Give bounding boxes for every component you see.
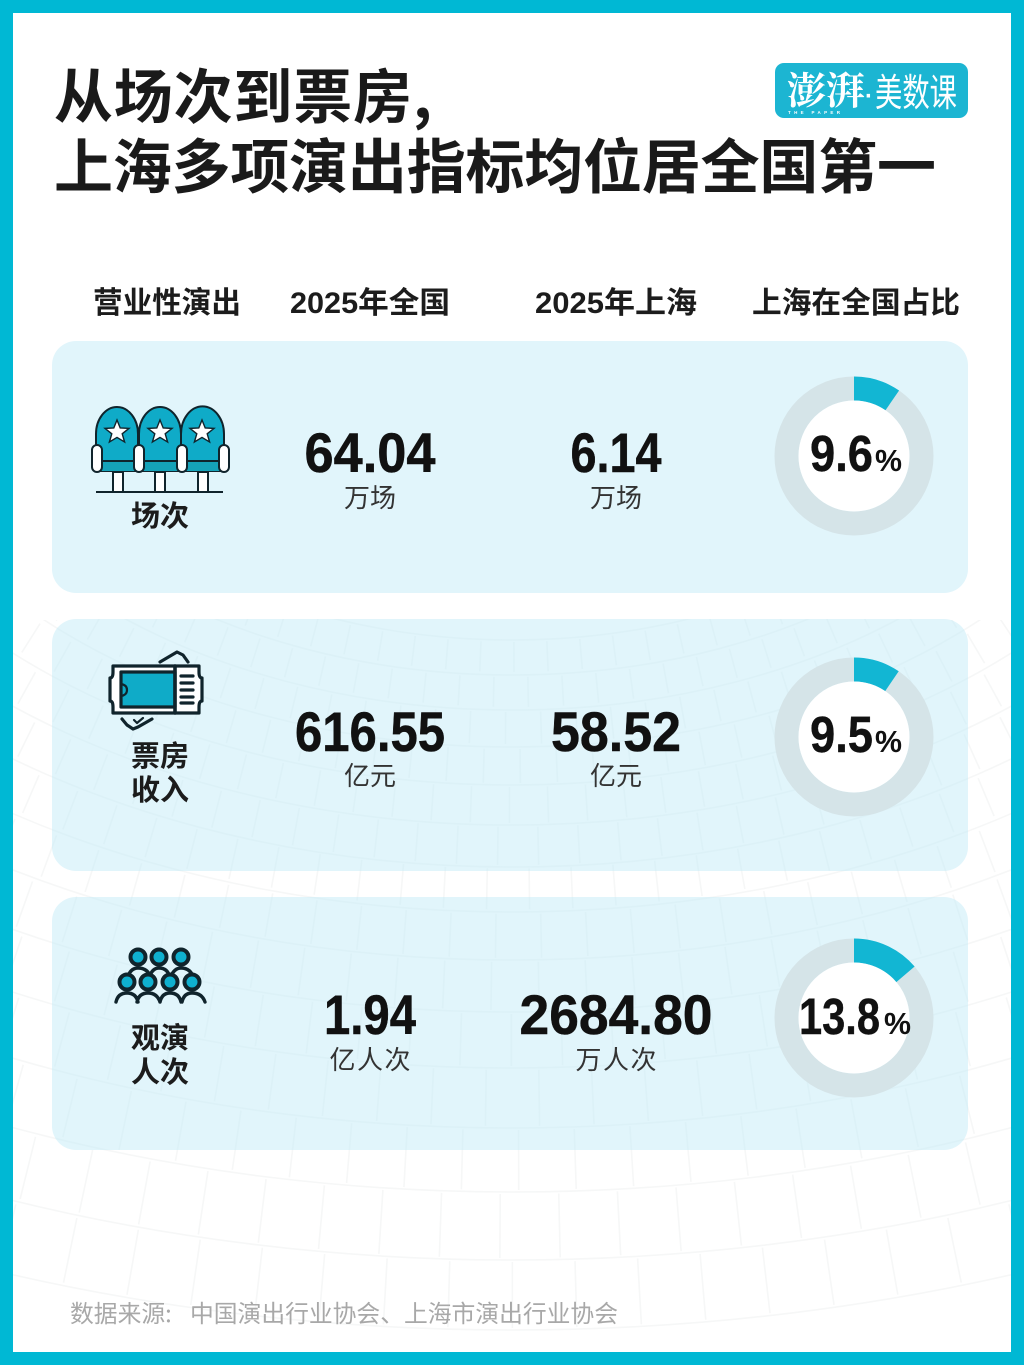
donut chart: 9.6%: 9.6 <box>810 425 873 482</box>
row label: 收入 <box>131 774 189 807</box>
title: 从场次到票房, <box>54 50 432 135</box>
donut chart: 9.6% <box>786 388 922 524</box>
donut chart: 13.8%: 13.8 <box>799 988 880 1045</box>
column headers: 2025年上海 <box>535 287 697 320</box>
donut chart: 9.5%: 9.5 <box>810 706 873 763</box>
column headers: 2025年全国 <box>290 287 450 320</box>
panel: performances <box>92 388 922 533</box>
logo: the paper data class: 美数课 <box>875 73 957 115</box>
icon: theatre seats <box>92 406 229 492</box>
shanghai value: 58.52 <box>551 700 681 763</box>
donut chart: 9.5%: % <box>875 724 902 759</box>
shanghai value: 万场 <box>590 483 642 513</box>
national value: 1.94 <box>324 983 416 1046</box>
shanghai value <box>520 983 712 1075</box>
national value <box>304 421 436 513</box>
logo: the paper data class: · <box>865 83 873 110</box>
shanghai value: 万人次 <box>576 1045 656 1075</box>
shanghai value: 亿元 <box>590 761 642 791</box>
panel: box office <box>110 652 922 807</box>
shanghai value <box>570 421 662 513</box>
donut chart: 13.8%: % <box>884 1006 911 1041</box>
national value: 亿人次 <box>330 1045 410 1075</box>
title <box>54 50 936 205</box>
national value: 64.04 <box>304 421 436 484</box>
row label <box>131 1022 189 1089</box>
source note: 中国演出行业协会、上海市演出行业协会 <box>190 1294 618 1329</box>
column headers <box>93 287 960 320</box>
row label: 场次 <box>131 500 189 533</box>
logo: the paper data class: THE PAPER <box>788 110 841 115</box>
column headers: 营业性演出 <box>93 287 241 320</box>
row label <box>131 740 189 807</box>
row label: 票房 <box>131 740 189 773</box>
logo: the paper data class: 澎湃 <box>787 60 865 115</box>
icon: audience <box>116 950 205 1002</box>
national value: 万场 <box>344 483 396 513</box>
row label: 观演 <box>131 1022 189 1055</box>
column headers: 上海在全国占比 <box>752 287 960 320</box>
shanghai value <box>551 700 681 791</box>
national value: 616.55 <box>295 700 445 763</box>
national value: 亿元 <box>344 761 396 791</box>
source note: 数据来源: <box>70 1294 172 1329</box>
donut chart: 9.5% <box>786 670 922 804</box>
donut chart: 13.8% <box>786 950 922 1086</box>
row label: 人次 <box>131 1056 189 1089</box>
panel: attendance <box>116 950 922 1089</box>
national value <box>295 700 445 791</box>
donut chart: 9.6%: % <box>875 443 902 478</box>
icon: ticket <box>110 652 202 729</box>
national value <box>324 983 416 1075</box>
title: 上海多项演出指标均位居全国第一 <box>54 120 936 205</box>
logo: the paper data class <box>775 60 968 118</box>
panel backgrounds <box>52 341 968 1150</box>
shanghai value: 6.14 <box>570 421 662 484</box>
shanghai value: 2684.80 <box>520 983 712 1046</box>
